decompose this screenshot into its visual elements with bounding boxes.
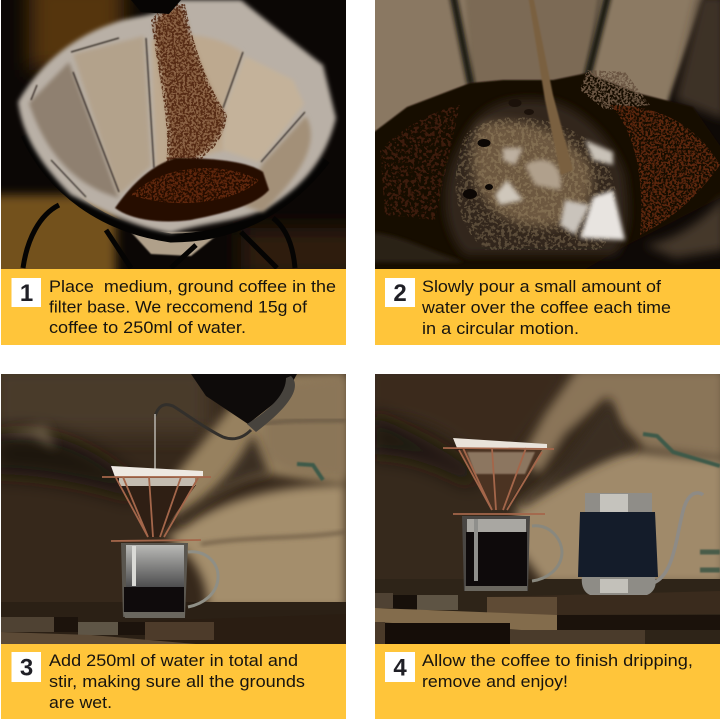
glass mug (462, 516, 562, 591)
coffee bed (370, 73, 720, 275)
water stream (154, 414, 156, 469)
step text: Add 250ml of water in total and (49, 651, 298, 670)
caption bar (1, 269, 346, 345)
table planks (375, 591, 720, 644)
copper dripper (443, 438, 554, 514)
table planks (1, 614, 346, 644)
step text: Allow the coffee to finish dripping, (422, 651, 693, 670)
number badge: 4 (393, 654, 407, 682)
glass mug (121, 543, 218, 618)
panel: step 3 (0, 364, 351, 719)
burlap sacks (520, 369, 720, 474)
panel: step 2 (365, 0, 720, 345)
caption bar (375, 269, 720, 345)
falling coffee stream (154, 8, 225, 160)
burlap sacks (171, 374, 346, 519)
panel: step 4 (370, 369, 720, 719)
step text: filter base. We reccomend 15g of (49, 298, 307, 316)
step text: remove and enjoy! (422, 672, 568, 691)
number badge (385, 652, 415, 682)
step text: coffee to 250ml of water. (49, 318, 246, 337)
photo: kettle pouring into dripper over glass mug (1, 374, 346, 644)
kettle (155, 374, 297, 439)
number badge: 2 (393, 280, 407, 307)
step text: stir, making sure all the grounds (49, 672, 305, 691)
photo: coffee grounds poured into paper filter (1, 0, 346, 269)
blurred filter rim (370, 232, 465, 262)
copper dripper (102, 466, 211, 541)
step text: Place medium, ground coffee in the (49, 277, 336, 296)
number badge: 3 (20, 654, 33, 682)
caption bar (375, 644, 720, 719)
number badge: 1 (20, 280, 33, 307)
caption bar (1, 644, 346, 719)
number badge (12, 278, 41, 307)
step text: Slowly pour a small amount of (422, 277, 661, 296)
number badge (12, 652, 41, 682)
froth (445, 99, 628, 255)
step text: are wet. (49, 693, 112, 712)
water stream (528, 0, 573, 175)
filter paper (18, 0, 336, 233)
panel: step 1 (0, 0, 361, 345)
black kettle with gooseneck (578, 493, 703, 595)
photo: water poured over wet coffee bed (375, 0, 720, 269)
step text: water over the coffee each time (421, 298, 671, 317)
coffee heap (115, 158, 269, 222)
photo: finished coffee, dripper and kettle on table (375, 374, 720, 644)
step text: in a circular motion. (422, 319, 579, 338)
number badge (385, 278, 415, 307)
